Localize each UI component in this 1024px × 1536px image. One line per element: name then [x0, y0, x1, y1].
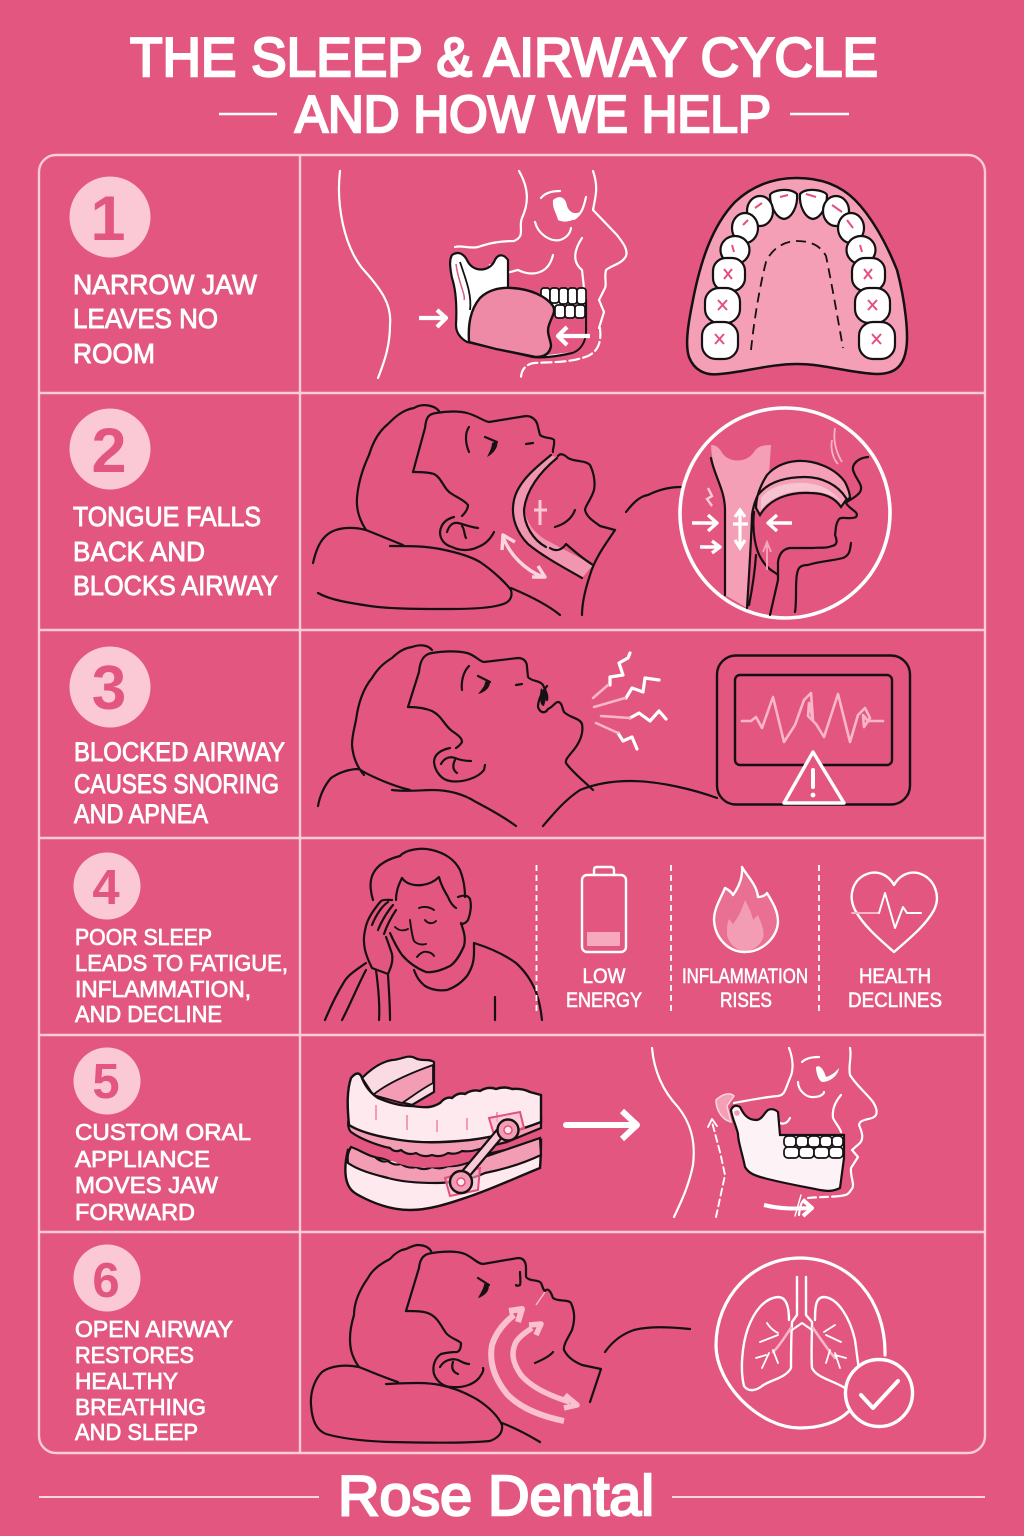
title	[130, 26, 878, 144]
step 3 label: BLOCKED AIRWAY	[74, 737, 285, 767]
step 5 label: CUSTOM ORAL	[75, 1119, 251, 1145]
icon: heart with pulse: DECLINES	[848, 989, 942, 1012]
step 2 label: 2	[91, 416, 127, 486]
step 5 label	[74, 1048, 251, 1225]
icon: flame	[682, 867, 808, 1012]
title: THE SLEEP & AIRWAY CYCLE	[130, 26, 878, 88]
icon: flame: INFLAMMATION	[682, 965, 808, 988]
footer brand: Rose Dental	[338, 1464, 654, 1528]
step 6 label: BREATHING	[75, 1394, 206, 1420]
icon: lungs with check mark	[716, 1258, 912, 1428]
icon: heart with pulse	[848, 873, 942, 1012]
step 6 label: HEALTHY	[75, 1368, 178, 1394]
illustration: tired person holding head	[325, 849, 542, 1020]
step 4 label: 4	[92, 861, 120, 915]
step 5 label: APPLIANCE	[75, 1146, 210, 1172]
step 6 label	[74, 1244, 233, 1445]
step 5 label: 5	[92, 1055, 120, 1109]
step 3 label: CAUSES SNORING	[74, 769, 279, 799]
step 4 label: POOR SLEEP	[75, 924, 212, 950]
step 1 label: LEAVES NO	[73, 303, 218, 334]
illustration: airway close-up circle	[680, 408, 890, 618]
icon: low battery: LOW	[582, 965, 626, 988]
panel grid	[39, 155, 985, 1453]
step 2 label	[70, 408, 278, 601]
title: AND HOW WE HELP	[295, 86, 771, 144]
snore zigzag lines	[593, 653, 666, 749]
illustration: sleeper with open airway	[311, 1245, 690, 1443]
lower tray	[345, 1140, 541, 1210]
upper tray	[348, 1074, 541, 1142]
step 6 label: AND SLEEP	[75, 1419, 198, 1445]
step 4 label	[74, 852, 288, 1027]
step 1 label	[70, 176, 258, 369]
icon: low battery: ENERGY	[566, 989, 642, 1012]
lower teeth pink band	[348, 1138, 541, 1183]
step 5 label: MOVES JAW	[75, 1172, 218, 1198]
illustration: narrow jaw skull profile	[339, 171, 627, 378]
sleep monitor with warning	[717, 656, 910, 804]
illustration: jaw moved forward	[652, 1048, 877, 1217]
step 1 label: NARROW JAW	[73, 269, 258, 300]
illustration: sleeper with blocked airway	[313, 405, 681, 615]
gap between teeth	[376, 1142, 507, 1168]
step 3 label	[70, 646, 285, 829]
dashed dividers	[536, 865, 819, 1013]
arrow: to jaw forward	[566, 1111, 637, 1139]
step 3 label: 3	[92, 654, 126, 723]
step 5 label: FORWARD	[75, 1199, 195, 1225]
jaw teeth	[784, 1136, 843, 1158]
step 6 label: 6	[92, 1254, 120, 1308]
back of arch	[362, 1057, 434, 1105]
illustration: oral appliance	[345, 1057, 541, 1210]
step 6 label: RESTORES	[75, 1342, 194, 1368]
step 4 label: LEADS TO FATIGUE,	[75, 950, 288, 976]
step 2 label: BLOCKS AIRWAY	[73, 570, 278, 601]
icon: low battery	[566, 867, 642, 1012]
step 2 label: BACK AND	[73, 536, 205, 567]
step 4 label: AND DECLINE	[75, 1001, 222, 1027]
step 1 label: ROOM	[73, 338, 155, 369]
step 2 label: TONGUE FALLS	[73, 501, 261, 532]
icon: flame: RISES	[720, 989, 772, 1012]
airflow arrows	[491, 1309, 577, 1421]
step 6 label: OPEN AIRWAY	[75, 1316, 233, 1342]
icon: heart with pulse: HEALTH	[859, 965, 931, 988]
illustration: upper dental arch	[687, 178, 907, 374]
upper teeth pink band	[348, 1118, 541, 1156]
step 3 label: AND APNEA	[74, 799, 208, 829]
upper and lower teeth	[541, 288, 586, 318]
illustration: snoring sleeper	[318, 645, 717, 826]
step 4 label: INFLAMMATION,	[75, 976, 251, 1002]
step 1 label: 1	[90, 184, 126, 254]
